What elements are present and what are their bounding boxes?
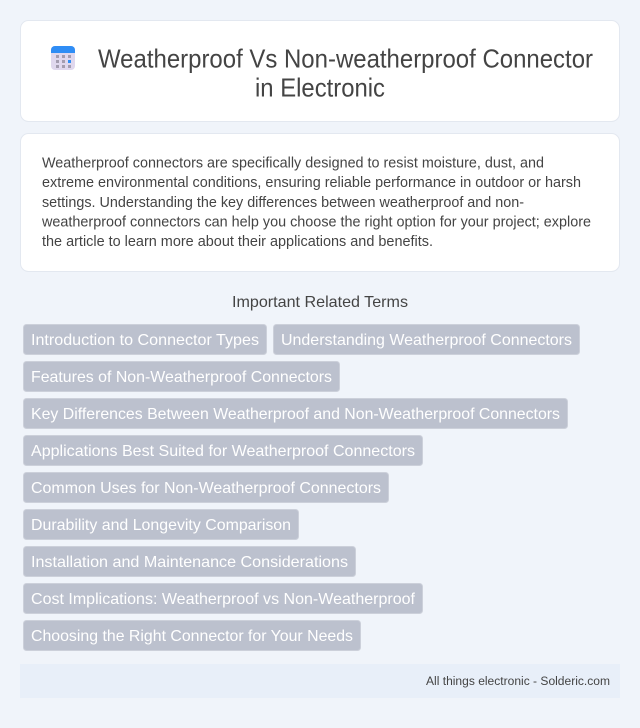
panel: intro text [20, 134, 620, 272]
tag [24, 362, 340, 392]
intro paragraph: weatherproof connectors can help you choose the right option for your project; explore [41, 214, 591, 230]
tag [24, 436, 422, 466]
tag [24, 546, 356, 576]
tag: Introduction to Connector Types [31, 332, 259, 349]
intro paragraph: settings. Understanding the key differences between weatherproof and non- [42, 195, 524, 211]
tag [24, 620, 360, 650]
title: in Electronic [255, 72, 385, 102]
tag: Installation and Maintenance Considerations [31, 554, 348, 571]
tag: Durability and Longevity Comparison [31, 517, 291, 534]
icon: calendar [51, 46, 75, 70]
tag [24, 398, 568, 428]
tag: Applications Best Suited for Weatherproof Connectors [31, 443, 415, 460]
tag [24, 324, 266, 354]
tag [24, 472, 388, 502]
panel: related term tags [24, 324, 580, 650]
tag [24, 510, 298, 540]
tag: Common Uses for Non-Weatherproof Connectors [31, 480, 381, 497]
title: Weatherproof Vs Non-weatherproof Connector [98, 44, 593, 74]
intro paragraph: extreme environmental conditions, ensuring reliable performance in outdoor or harsh [42, 175, 581, 191]
intro paragraph [41, 156, 591, 250]
tag: Choosing the Right Connector for Your Needs [31, 628, 353, 645]
heading: related terms: Important Related Terms [232, 294, 408, 311]
tag [274, 324, 580, 354]
tag: Cost Implications: Weatherproof vs Non-Weatherproof [31, 591, 416, 608]
tag [24, 584, 422, 614]
tag: Understanding Weatherproof Connectors [281, 332, 572, 349]
title [98, 44, 593, 102]
footer: All things electronic - Solderic.com [426, 674, 610, 688]
footer [20, 664, 620, 698]
tag: Key Differences Between Weatherproof and Non-Weatherproof Connectors [31, 406, 560, 423]
panel: title card [20, 20, 620, 122]
tag: Features of Non-Weatherproof Connectors [31, 369, 332, 386]
intro paragraph: the article to learn more about their applications and benefits. [42, 234, 433, 250]
intro paragraph: Weatherproof connectors are specifically designed to resist moisture, dust, and [42, 156, 544, 172]
